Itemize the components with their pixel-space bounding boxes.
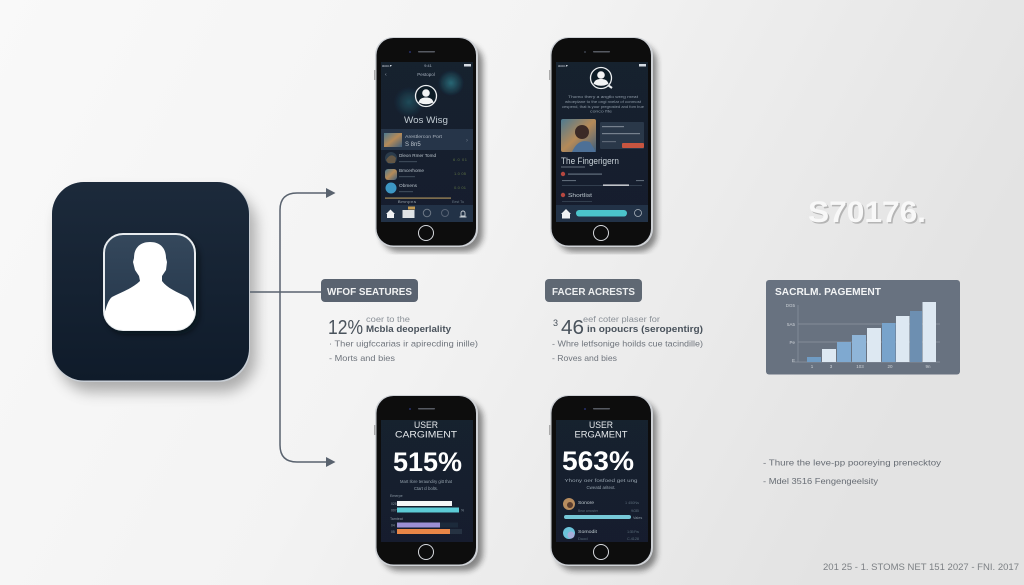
y axis labels: DG5 <box>786 303 795 308</box>
intro text: Thomo thery a angtlo wreg meat <box>568 95 639 99</box>
phone screen: 9:41 <box>424 63 433 68</box>
footer text: 201 25 - 1. STOMS NET 151 2027 - FNI. 2017 <box>823 562 1019 573</box>
stat: Mcbla deoperlality <box>366 324 451 334</box>
photo thumbnail <box>561 119 596 152</box>
list rows: Dleon Rmer Tomd <box>399 153 437 158</box>
phone screen: ooo.▾ <box>558 63 568 68</box>
list rows: 1:35 Fw <box>627 530 639 534</box>
caption: Mart Ilore teraundiry gitt that <box>400 479 453 485</box>
x axis labels: 9n <box>925 364 931 369</box>
heading badge: FACER ACRESTS <box>552 286 635 298</box>
intro text <box>562 95 644 114</box>
screen heading: ERGAMENT <box>574 430 628 440</box>
info card <box>600 122 644 149</box>
stat: 12% <box>328 317 363 339</box>
bullets: - Roves and bies <box>552 353 617 363</box>
y axis labels <box>786 303 795 363</box>
screen heading <box>574 420 628 440</box>
panel: bar chart <box>766 280 960 374</box>
x axis labels: 1 <box>811 364 814 369</box>
x axis labels: 103 <box>856 364 864 369</box>
profile name: Wos Wisg <box>404 115 448 126</box>
list rows: Duod <box>578 536 588 541</box>
bullets <box>552 338 703 363</box>
list rows: 1.0 05 <box>454 171 467 176</box>
phone: profile screen <box>374 37 483 252</box>
intro text: cespend, that is your pregrosted and fom bue <box>562 105 644 109</box>
intro text: whoeplane to the ongi nvelar of conmost <box>565 100 642 104</box>
phone screen <box>381 62 473 222</box>
phone screen <box>381 420 473 542</box>
phone screen: S 8n5 <box>405 142 421 148</box>
icon: search avatar <box>590 68 612 88</box>
big number: 563% <box>562 446 634 476</box>
icon: avatar <box>416 86 436 106</box>
bar chart: 04 <box>391 524 395 528</box>
notes text block: - Mdel 3516 Fengengeelsity <box>763 476 879 486</box>
notes text block <box>763 458 942 486</box>
x axis labels <box>811 364 931 369</box>
intro text: conco fite <box>590 110 612 114</box>
y axis labels: E <box>792 358 795 363</box>
list rows <box>385 152 468 204</box>
screen heading: CARGIMENT <box>395 430 457 440</box>
bullets: · Ther uigfccarias ir apirecding inille) <box>329 338 478 348</box>
heading badge <box>321 279 418 302</box>
phone: user engagement 563% <box>549 395 657 571</box>
panel: features <box>321 279 478 363</box>
y axis labels: 5A5 <box>787 322 795 327</box>
bar chart <box>390 494 464 534</box>
phone screen: Pestopol <box>417 72 435 77</box>
list rows <box>563 498 642 541</box>
caption: Cweatd aritext. <box>586 485 616 491</box>
bar chart: 007 <box>391 508 397 512</box>
panel: faster agents <box>545 279 703 363</box>
list rows: Bmnpns <box>398 199 416 204</box>
tab bar <box>556 205 648 222</box>
list rows: Sonore <box>578 500 595 505</box>
shortlist row <box>561 193 593 202</box>
bullets: - Whre letfsonige hoilds cue tacindille) <box>552 338 703 348</box>
y axis labels: Pe <box>789 340 795 345</box>
stat: 46 <box>561 317 584 339</box>
list rows: Vales <box>633 516 642 520</box>
bar chart: 025 <box>391 502 397 506</box>
caption <box>564 478 638 491</box>
list rows: Somodit <box>578 529 598 534</box>
list rows: C.4128 <box>627 537 639 541</box>
list rows: Obmens <box>399 183 417 188</box>
phone: user engagement 515% <box>374 395 483 571</box>
caption <box>400 479 453 492</box>
list rows: Eest Tu <box>452 200 464 204</box>
stat <box>328 315 451 339</box>
stat: coer to the <box>366 315 411 324</box>
list rows: 0.0 01 <box>454 185 467 190</box>
headline figure: S70176. <box>810 198 928 230</box>
heading badge <box>545 279 642 302</box>
screen heading: USER <box>414 420 438 431</box>
big number: 515% <box>393 447 462 477</box>
caption: Ctart cl bolts. <box>414 486 438 492</box>
list rows: Bmcerhome <box>399 168 425 173</box>
chart title: SACRLM. PAGEMENT <box>775 286 882 298</box>
arrow connectors <box>250 188 336 467</box>
bar chart: Tamteat <box>390 517 403 521</box>
heading badge: WFOF SEATURES <box>327 286 412 298</box>
stat <box>553 315 703 339</box>
phone screen: Arestlercon Port <box>405 134 443 139</box>
phone screen: › <box>466 138 468 144</box>
phone screen: ‹ <box>385 72 387 78</box>
caption: Yhony oer fosfoed get ung <box>564 478 638 484</box>
list rows: 1 450Ns <box>625 501 639 505</box>
bullets <box>329 338 478 363</box>
gridlines and axes <box>792 305 940 362</box>
bar chart: Emerpe <box>390 494 403 498</box>
shortlist row: Shortlist <box>568 193 593 199</box>
icon: app user card <box>52 182 256 392</box>
phone: content screen <box>549 37 657 252</box>
stat: in opoucrs (seropentirg) <box>587 324 703 334</box>
list rows: Bear arnoster <box>578 508 599 513</box>
screen heading <box>395 420 457 440</box>
bar chart: % <box>461 508 464 512</box>
x axis labels: 20 <box>887 364 893 369</box>
screen heading: USER <box>589 420 613 431</box>
progress row <box>561 172 644 186</box>
article title: The Fingerigern <box>561 156 619 166</box>
phone screen: ooo.▾ <box>382 63 392 68</box>
bars <box>807 302 936 362</box>
stat: 3 <box>553 318 558 328</box>
x axis labels: 3 <box>830 364 833 369</box>
tab bar <box>381 205 473 222</box>
phone screen <box>556 420 648 542</box>
phone screen <box>556 62 648 222</box>
list rows: 9.035 <box>631 509 639 513</box>
notes text block: - Thure the leve-pp pooreying prenecktoy <box>763 458 942 468</box>
headline figure: S70176. <box>808 196 926 229</box>
bar chart: 05 <box>391 530 395 534</box>
list rows: 6.0 01 <box>453 157 468 162</box>
stat: eef coter plaser for <box>583 315 660 324</box>
bullets: - Morts and bies <box>329 353 395 363</box>
